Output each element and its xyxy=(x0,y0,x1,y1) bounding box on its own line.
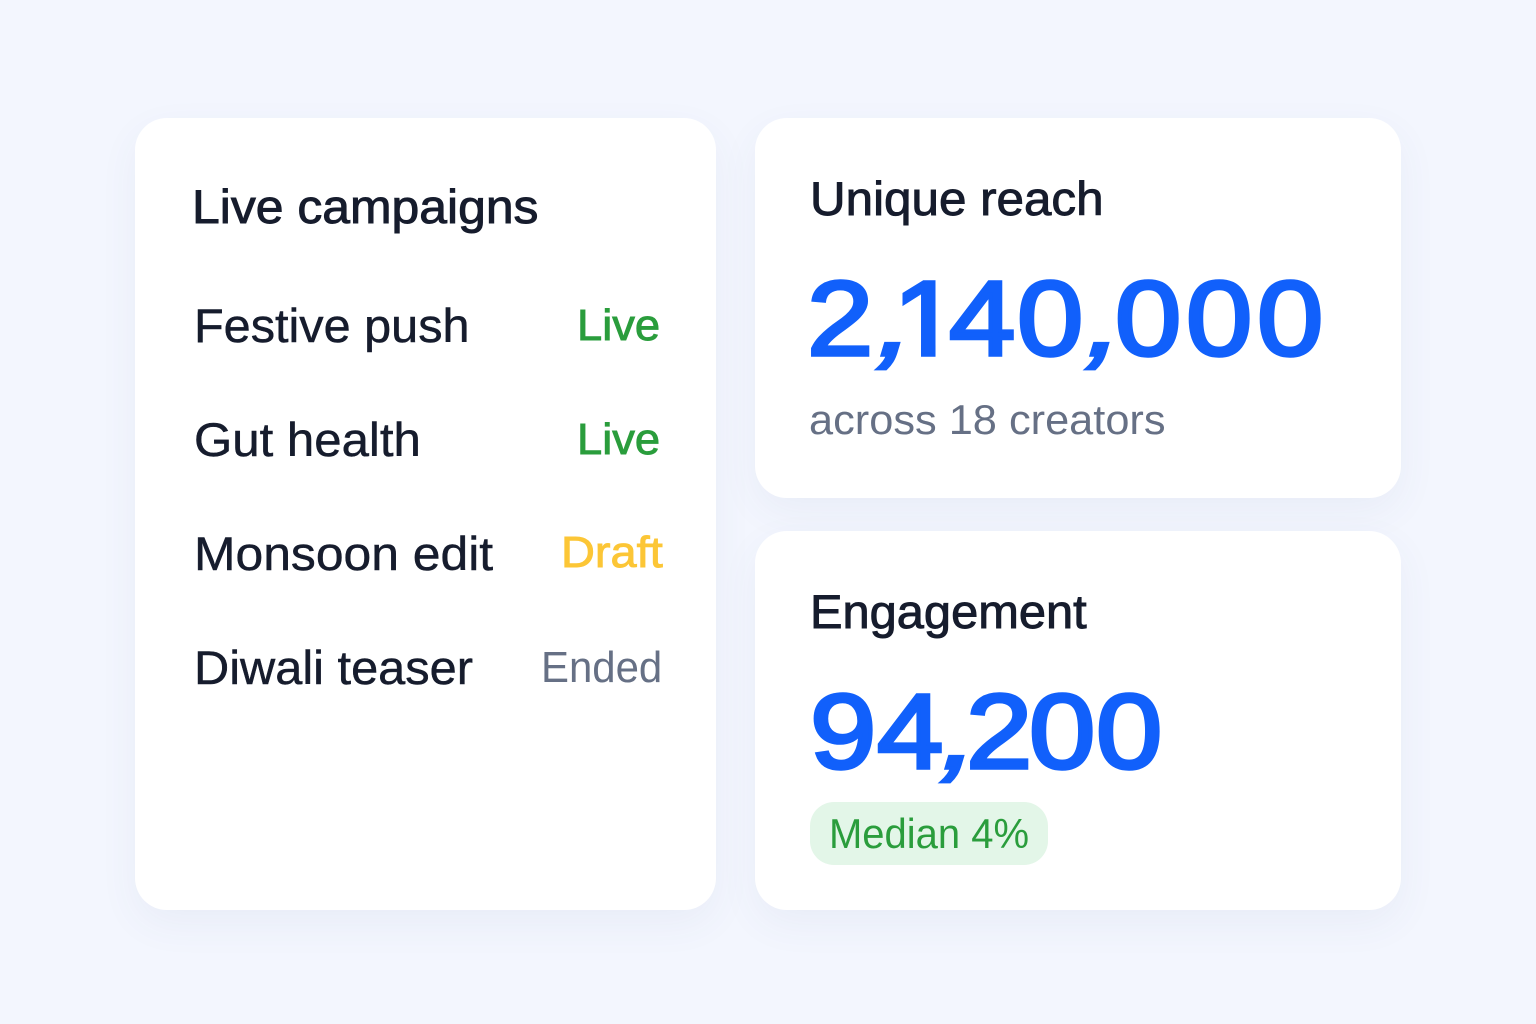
metric: unique reach value: 0 xyxy=(1257,260,1323,378)
metric: unique reach value: , xyxy=(864,260,935,378)
status: Live: Live xyxy=(577,415,660,464)
metric: engagement value: 9 xyxy=(810,673,877,791)
metric: unique reach value: 4 xyxy=(948,260,1015,378)
status: Live: Live xyxy=(577,301,660,350)
metric: engagement value: 2 xyxy=(966,673,1032,791)
badge: median 4% xyxy=(810,802,1048,865)
metric: engagement value: , xyxy=(928,673,998,791)
metric: unique reach value: 0 xyxy=(1017,260,1083,378)
metric: unique reach value: 0 xyxy=(1186,260,1252,378)
badge text: Median 4% xyxy=(829,810,1029,857)
row label: Monsoon edit: Monsoon edit xyxy=(194,527,493,580)
heading: live campaigns: Live campaigns xyxy=(192,180,538,233)
caption: across 18 creators: across 18 creators xyxy=(809,396,1166,443)
row label: Gut health: Gut health xyxy=(194,413,421,466)
metric: unique reach value: 2 xyxy=(807,260,873,378)
metric: unique reach value xyxy=(807,260,1323,378)
status: Draft: Draft xyxy=(561,528,663,577)
row label: Diwali teaser: Diwali teaser xyxy=(194,641,473,694)
status: Ended: Ended xyxy=(541,643,662,692)
metric: engagement value: 4 xyxy=(876,673,943,791)
panel: live campaigns xyxy=(135,118,716,910)
panel: engagement xyxy=(755,531,1401,910)
panel: unique reach xyxy=(755,118,1401,498)
heading: engagement: Engagement xyxy=(810,585,1087,638)
metric: engagement value: 0 xyxy=(1096,673,1162,791)
row label: Festive push: Festive push xyxy=(194,299,470,352)
metric: unique reach value: 1 xyxy=(893,260,959,378)
heading: unique reach: Unique reach xyxy=(810,172,1104,225)
metric: engagement value xyxy=(810,673,1162,791)
metric: engagement value: 0 xyxy=(1029,673,1095,791)
metric: unique reach value: , xyxy=(1073,260,1144,378)
metric: unique reach value: 0 xyxy=(1115,260,1181,378)
